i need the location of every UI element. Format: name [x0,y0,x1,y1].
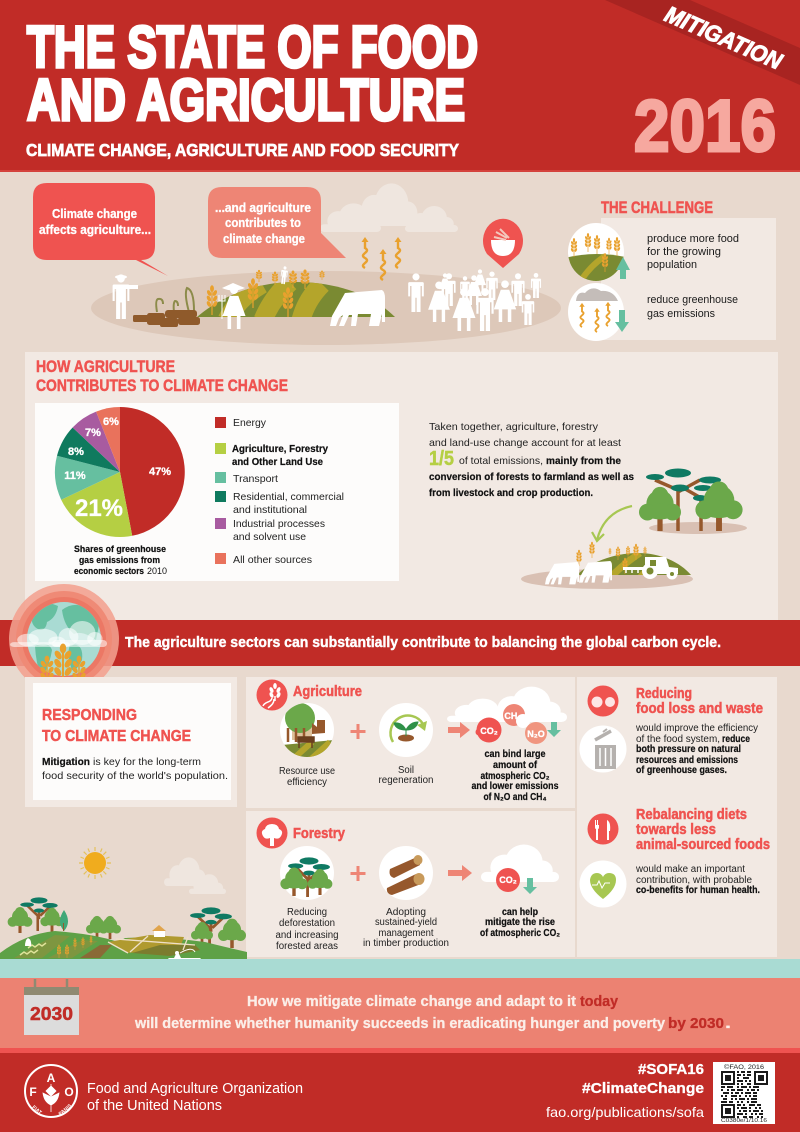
text: one fifth of emissions: 1/5 [429,448,454,470]
gases in clouds: N₂O [527,729,545,739]
message text: today [580,994,618,1010]
labels [276,907,449,952]
intro illustration [33,183,561,345]
legend: Agriculture, Forestry [232,443,328,455]
text: can bind carbon: amount of [493,760,538,771]
heading [36,358,288,395]
ribbon: mitigation [605,0,800,85]
labels: in timber production [363,938,449,949]
icon: reducing deforestation [280,846,334,900]
icon: food bowl pin [483,219,523,268]
hills [0,931,247,960]
farmer left [113,274,138,319]
text: one fifth of emissions [429,421,634,499]
header band [0,0,800,172]
wilted plants and dry soil [133,288,200,327]
band: 2030 message [0,978,800,1053]
small figure on hill [280,266,288,285]
panel: food loss and diets [577,677,777,957]
hashtags and link: #ClimateChange [582,1080,704,1097]
icon: tree badge [256,818,288,848]
icon: more food [568,223,630,281]
legend: and solvent use [233,531,306,543]
icon: plus [350,724,366,739]
labels: deforestation [279,918,335,929]
legend: Industrial processes [233,518,325,530]
icon: plus [350,866,366,881]
legend: All other sources [233,554,312,566]
carbon in cloud [481,845,559,894]
speech bubble: agriculture contributes: contributes to [225,216,301,230]
text: produce more food: produce more food [647,233,739,245]
pie caption: gas emissions from [79,555,160,566]
heading: RESPONDING [42,707,137,724]
heading: TO CLIMATE CHANGE [42,728,191,745]
heading: HOW AGRICULTURE [36,358,175,376]
title: AND AGRICULTURE [27,68,465,133]
icon: heart [580,860,626,908]
arrow [448,865,472,881]
subtitle: CLIMATE CHANGE, AGRICULTURE AND FOOD SECURITY [26,140,459,160]
organisation name: of the United Nations [87,1097,222,1114]
icon: calendar 2030 [24,979,79,1035]
text: food loss: of the food system, [636,734,720,745]
speech bubble: climate change [33,183,168,276]
text: one fifth of emissions: and land-use change account for at least [429,437,621,449]
speech bubble: climate change: Climate change [52,207,137,221]
year 2016: 2016 [634,86,776,167]
legend: and Other Land Use [232,456,323,468]
heading [42,707,191,745]
text: reduce greenhouse gas [647,294,738,320]
fisherman boat [168,949,201,963]
gases in clouds: CO₂ [480,726,498,736]
title: THE STATE OF FOOD [27,15,478,80]
water band [0,959,800,978]
text: can bind carbon: of N₂O and CH₄ [484,792,547,803]
pie chart: 6% [103,416,119,428]
legend: Transport [233,473,278,485]
heading: rebalancing diets: animal-sourced foods [636,837,770,853]
arrow [448,722,470,738]
banner: carbon cycle [0,620,800,666]
labels: Reducing [287,907,327,918]
text: food loss: both pressure on natural [636,744,741,755]
icon: resource use efficiency [280,703,334,760]
FAO logo [25,1065,77,1117]
ribbon: mitigation: MITIGATION [661,1,786,75]
crops [14,935,112,958]
body text: food security of the world's population. [42,770,228,782]
heading: forestry: Forestry [293,825,346,842]
text: can bind carbon: atmospheric CO₂ [480,771,550,782]
FAO logo: PANIS [58,1103,74,1117]
message text: How we mitigate climate change and adapt to it [247,994,576,1010]
cow [330,290,385,326]
speech bubble: agriculture contributes [208,187,346,258]
labels [279,765,434,788]
text: food loss [635,723,758,776]
pie chart: 21% [75,495,123,522]
labels: efficiency [287,777,327,788]
icon: food badge [588,686,618,716]
icon: timber logs [379,846,433,900]
hill with crop stripes [197,270,395,317]
speech bubble: agriculture contributes: ...and agriculture [215,201,311,215]
tractor [623,557,678,580]
text: one fifth of emissions: from livestock and crop production. [429,487,593,499]
text: food loss: reduce [722,734,750,745]
message text: . [725,1016,731,1032]
labels: and increasing [276,930,338,941]
text: food loss: resources and emissions [636,755,738,766]
footer [0,1053,800,1132]
speech bubble: agriculture contributes: climate change [223,232,305,246]
text: reduce greenhouse gas: gas emissions [647,308,715,320]
text: can bind carbon: can bind large [484,749,546,760]
text: can help [480,907,560,939]
body text [42,756,228,782]
pie caption: economic sectors [74,566,144,577]
FAO logo: F [29,1085,37,1099]
heading: reducing food loss: food loss and waste [636,701,763,717]
farmer with hat and pitchfork [219,283,246,329]
text: diets: co-benefits for human health. [636,885,760,896]
legend [215,417,344,566]
QR code [713,1062,775,1124]
illustration: landscape [0,847,247,963]
clouds [320,183,458,232]
pie chart: 7% [85,427,101,439]
icon: calendar 2030: 2030 [30,1004,73,1024]
body text: Mitigation [42,756,90,768]
house [152,925,166,937]
panel: responding to climate change [25,677,237,807]
text: can help: can help [502,907,538,918]
trees [8,897,246,948]
heading: rebalancing diets [636,807,770,853]
icon: less emissions [568,283,629,341]
text: produce more food [647,233,739,271]
text: food loss: of greenhouse gases. [636,765,727,776]
text: produce more food: for the growing [647,246,721,258]
illustration: farmland [521,542,695,589]
crowd of people [408,269,541,331]
arrow: forest to farmland [592,506,632,541]
icon: trash bin [580,726,626,772]
text: diets [635,864,760,896]
hashtags and link [546,1061,704,1120]
pie chart [55,407,185,537]
labels: management [378,928,434,939]
organisation name [87,1080,303,1114]
message text: will determine whether humanity succeeds in eradicating hunger and poverty [134,1016,665,1032]
message text [134,994,731,1032]
FAO logo: O [64,1085,74,1099]
legend: Residential, commercial [233,491,344,503]
speech bubble: climate change: affects agriculture... [39,223,151,237]
message text: by 2030 [668,1016,724,1032]
heading: the challenge: THE CHALLENGE [601,199,713,217]
labels: regeneration [378,775,434,786]
pie caption [74,544,167,577]
QR code: C0380e/1/10.16 [721,1118,767,1124]
text: diets: contribution, with probable [636,875,752,886]
icon: cutlery badge [588,814,618,844]
labels: Adopting [386,907,426,918]
labels: forested areas [276,941,338,952]
title [27,15,478,133]
heading: reducing food loss: Reducing [636,686,692,702]
text: produce more food: population [647,259,697,271]
text: can help: mitigate the rise [485,917,555,928]
pie chart: 11% [64,470,86,482]
icon: soil regeneration [379,703,433,757]
banner: carbon cycle: The agriculture sectors can substantially contribute to balancing the global carbon cycle. [125,635,721,651]
text: one fifth of emissions: of total emissions, [459,455,543,467]
QR code: ©FAO, 2016 [724,1064,765,1071]
heading: rebalancing diets: Rebalancing diets [636,807,747,823]
text: food loss: would improve the efficiency [635,723,758,734]
gases in clouds [447,687,567,744]
heading: rebalancing diets: towards less [636,822,716,838]
gases in clouds: CH₄ [504,711,522,721]
text: reduce greenhouse gas: reduce greenhouse [647,294,738,306]
icon: globe with wheat [9,584,119,678]
ground ellipse [91,271,561,345]
pie chart: 8% [68,446,84,458]
FAO logo: A [47,1071,56,1085]
text: one fifth of emissions: mainly from the [546,455,621,467]
labels: Soil [398,765,414,776]
pie caption: Shares of greenhouse [74,544,166,555]
greenhouse gas arrows [362,237,402,280]
text: can bind carbon [472,749,559,803]
FAO logo: FIAT [31,1104,43,1116]
icon: wheat badge [256,680,288,710]
text: one fifth of emissions: Taken together, agriculture, forestry [429,421,599,433]
organisation name: Food and Agriculture Organization [87,1080,303,1097]
panel: agriculture [246,677,575,808]
hashtags and link: #SOFA16 [638,1061,704,1078]
labels: sustained-yield [375,917,437,928]
card: pie chart and legend [35,403,399,581]
hashtags and link: fao.org/publications/sofa [546,1104,704,1120]
pie caption: 2010 [147,566,167,577]
labels: Resource use [279,766,335,777]
text: can bind carbon: and lower emissions [472,781,559,792]
heading: agriculture: Agriculture [293,683,362,700]
text: diets: would make an important [635,864,745,875]
panel: how agriculture contributes [25,352,778,620]
icon: sun [79,847,111,879]
fields [108,935,200,956]
legend: Energy [233,417,267,429]
carbon in cloud: CO₂ [499,875,517,885]
legend: and institutional [233,504,307,516]
cloud [164,857,226,894]
heading: reducing food loss [636,686,763,717]
text: one fifth of emissions: conversion of forests to farmland as well as [429,471,634,483]
pie chart: 47% [149,466,171,478]
heading: CONTRIBUTES TO CLIMATE CHANGE [36,377,288,395]
illustration: forest [639,468,747,534]
text: can help: of atmospheric CO₂ [480,928,560,939]
body text: is key for the long-term [93,756,201,768]
panel: the challenge [565,199,776,341]
panel: forestry [246,811,575,957]
